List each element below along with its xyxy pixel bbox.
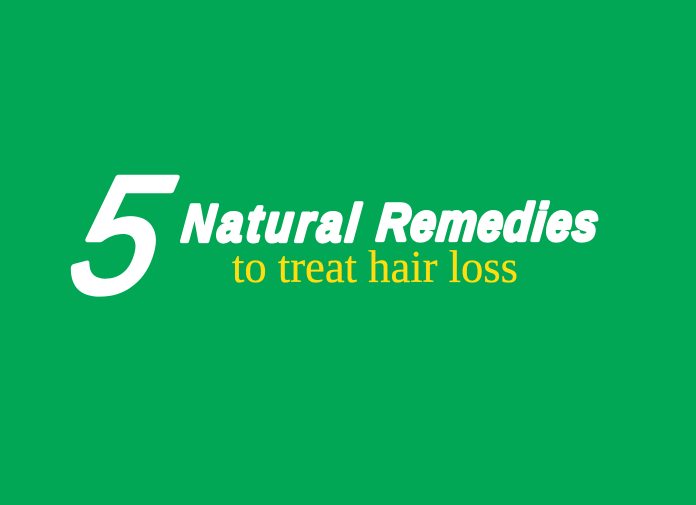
heading: Natural Remedies: [180, 194, 601, 253]
numeral 5: 5: [55, 141, 187, 327]
heading word: Natural: Natural: [180, 195, 363, 253]
subheading: to treat hair loss: to treat hair loss: [232, 242, 518, 292]
heading word: Remedies: Remedies: [375, 194, 601, 252]
